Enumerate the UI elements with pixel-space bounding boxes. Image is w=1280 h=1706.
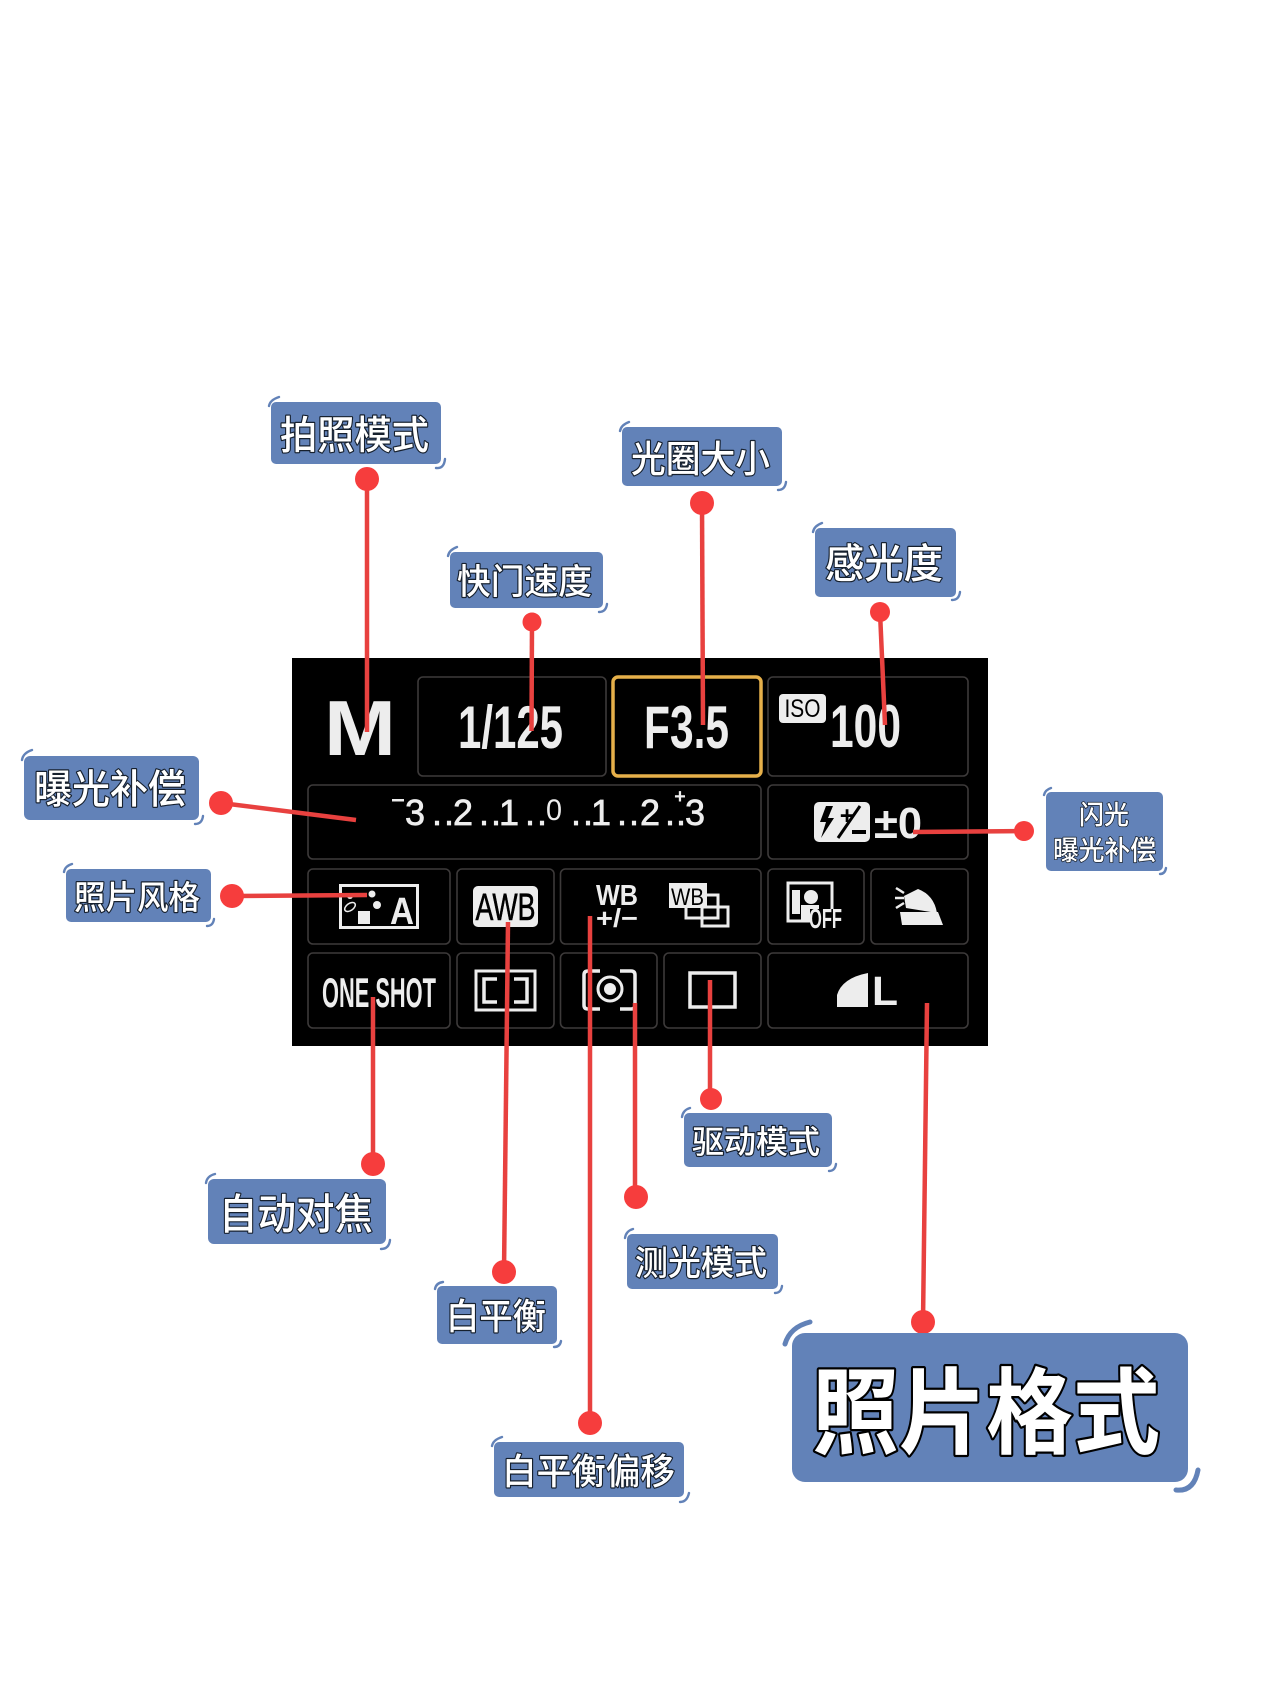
label: autofocus bbox=[206, 1174, 390, 1249]
WB shift and bracket cell: +/− bbox=[596, 903, 638, 933]
camera LCD quick control screen bbox=[292, 658, 988, 1046]
peripheral illumination correction cell: OFF bbox=[809, 903, 842, 934]
exposure compensation scale cell: + bbox=[674, 786, 686, 808]
label: metering mode bbox=[625, 1229, 782, 1293]
label: shooting mode: 拍照模式 bbox=[280, 415, 429, 458]
shutter speed cell bbox=[418, 677, 606, 776]
label: drive mode: 驱动模式 bbox=[692, 1124, 820, 1160]
leader line: autofocus bbox=[361, 997, 385, 1176]
leader line: picture style bbox=[220, 884, 367, 908]
peripheral illumination correction cell bbox=[768, 869, 864, 944]
leader line: drive mode bbox=[700, 980, 722, 1110]
leader line: exposure compensation bbox=[209, 791, 356, 820]
label: white balance: 白平衡 bbox=[446, 1296, 546, 1337]
label: exposure compensation bbox=[22, 750, 203, 824]
ISO cell: ISO bbox=[784, 695, 820, 723]
label: metering mode: 测光模式 bbox=[635, 1245, 767, 1283]
label: flash exposure compensation: 闪光 bbox=[1079, 800, 1129, 830]
image quality cell: L bbox=[872, 968, 898, 1014]
label: aperture bbox=[620, 422, 786, 490]
AF operation cell: one shot bbox=[308, 953, 450, 1028]
label: ISO sensitivity bbox=[813, 523, 960, 600]
picture style cell: A bbox=[390, 891, 414, 933]
label: image format, emphasized bbox=[785, 1322, 1198, 1490]
label: white balance shift bbox=[492, 1437, 689, 1502]
exposure compensation scale cell: 3..2..1....1..2..3 bbox=[405, 792, 705, 833]
label: white balance bbox=[435, 1282, 561, 1347]
label: image format, emphasized: 照片格式 bbox=[812, 1361, 1160, 1466]
label: aperture: 光圈大小 bbox=[631, 439, 770, 480]
picture style cell bbox=[308, 869, 450, 944]
leader line: aperture bbox=[690, 491, 714, 725]
white balance cell: AWB bbox=[476, 887, 536, 929]
label: flash exposure compensation: 曝光补偿 bbox=[1053, 836, 1156, 866]
ISO cell: 100 bbox=[830, 693, 901, 760]
WB shift and bracket cell bbox=[560, 869, 761, 944]
shutter speed cell: 1/125 bbox=[458, 694, 563, 761]
metering mode cell bbox=[560, 953, 657, 1028]
label: drive mode bbox=[682, 1108, 836, 1171]
label: autofocus: 自动对焦 bbox=[219, 1191, 373, 1238]
aperture cell, highlighted: F3.5 bbox=[644, 694, 729, 761]
flash exposure compensation cell: + bbox=[840, 802, 854, 830]
label: ISO sensitivity: 感光度 bbox=[825, 541, 943, 587]
flash exposure compensation cell bbox=[768, 785, 968, 859]
leader line: metering mode bbox=[624, 1003, 648, 1209]
label: exposure compensation: 曝光补偿 bbox=[34, 768, 186, 812]
flash exposure compensation cell: ±0 bbox=[874, 799, 922, 848]
AF frame cell bbox=[457, 953, 554, 1028]
leader line: flash compensation bbox=[913, 821, 1034, 841]
image quality cell bbox=[768, 953, 968, 1028]
label: shutter speed: 快门速度 bbox=[457, 563, 592, 602]
mode cell: M: M bbox=[324, 684, 396, 772]
leader line: white balance bbox=[492, 922, 516, 1284]
label: shutter speed bbox=[448, 547, 607, 612]
flash hand icon cell bbox=[871, 869, 968, 944]
WB shift and bracket cell: WB bbox=[671, 884, 704, 911]
label: picture style: 照片风格 bbox=[74, 879, 200, 916]
leader line: white balance shift bbox=[578, 916, 602, 1435]
label: shooting mode bbox=[269, 397, 445, 468]
white balance cell bbox=[457, 869, 554, 944]
leader line: shutter speed bbox=[522, 612, 542, 731]
exposure compensation scale cell: 0 bbox=[546, 794, 562, 827]
label: flash exposure compensation bbox=[1044, 788, 1166, 874]
aperture cell, highlighted bbox=[613, 677, 761, 776]
AF operation cell: one shot: ONE SHOT bbox=[322, 969, 436, 1016]
label: picture style bbox=[64, 864, 214, 926]
leader line: image format bbox=[911, 1003, 935, 1334]
leader line: shooting mode bbox=[355, 467, 379, 732]
drive mode cell bbox=[664, 953, 761, 1028]
WB shift and bracket cell: WB bbox=[596, 880, 638, 912]
exposure compensation scale cell bbox=[308, 785, 761, 859]
ISO cell bbox=[768, 677, 968, 776]
leader line: ISO bbox=[870, 602, 890, 725]
label: white balance shift: 白平衡偏移 bbox=[502, 1451, 675, 1492]
